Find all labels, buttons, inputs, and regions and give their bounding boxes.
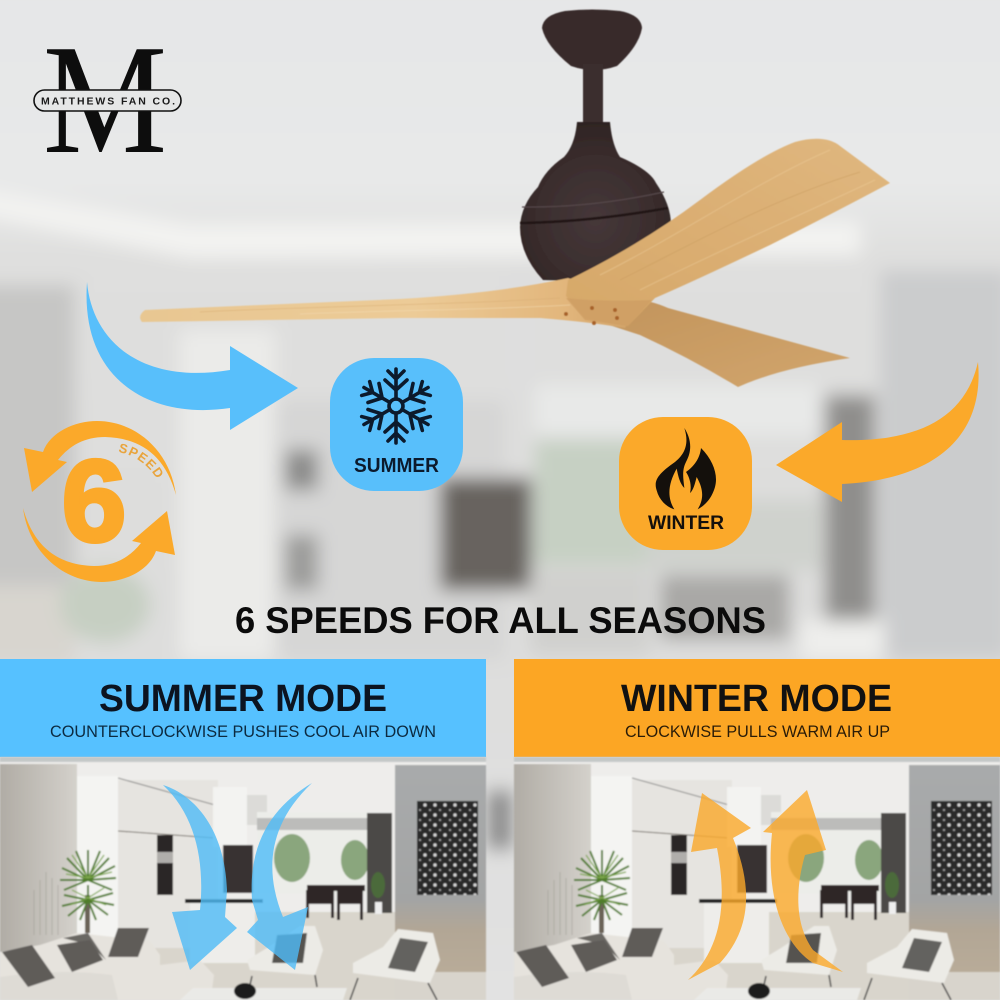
badge: summer	[330, 358, 463, 491]
winter room photo	[514, 757, 1000, 1000]
summer airflow arrows	[163, 783, 312, 970]
logo	[34, 12, 181, 186]
summer header	[0, 659, 486, 757]
logo band	[34, 90, 181, 111]
ceiling canopy	[542, 10, 642, 70]
icon: flame	[656, 428, 716, 509]
panel: winter mode	[514, 659, 1000, 1000]
blade grain	[200, 150, 875, 314]
bottom circular arrow	[23, 508, 175, 582]
summer label: SUMMER	[354, 455, 440, 477]
lower blade	[600, 300, 850, 387]
logo letter M: M	[43, 12, 167, 186]
badge: winter	[619, 417, 752, 550]
hub screws	[564, 306, 619, 325]
logo name: MATTHEWS FAN CO.	[41, 96, 175, 108]
upper blade	[566, 139, 890, 326]
motor housing	[520, 122, 671, 283]
icon: snowflake	[358, 369, 434, 443]
icon: 6 speed	[23, 421, 176, 582]
fan	[140, 10, 890, 387]
arrow: winter orange	[776, 362, 979, 502]
long blade	[140, 278, 640, 328]
winter label: WINTER	[648, 512, 724, 534]
summer heading: SUMMER MODE	[99, 678, 387, 720]
winter heading: WINTER MODE	[621, 678, 892, 720]
speed label	[118, 452, 161, 487]
winter header	[514, 659, 1000, 757]
top circular arrow	[24, 421, 176, 495]
number 6: 6	[62, 436, 126, 566]
summer subheading: COUNTERCLOCKWISE PUSHES COOL AIR DOWN	[50, 723, 436, 741]
winter airflow arrows	[688, 790, 843, 980]
panel: summer mode	[0, 659, 486, 1000]
winter subheading: CLOCKWISE PULLS WARM AIR UP	[625, 723, 890, 741]
headline: 6 SPEEDS FOR ALL SEASONS	[235, 600, 766, 641]
hub	[566, 298, 652, 326]
summer room photo	[0, 757, 486, 1000]
arrow: summer blue	[87, 282, 298, 430]
icon: 6 speed: SPEED	[119, 444, 162, 477]
downrod	[583, 64, 603, 126]
